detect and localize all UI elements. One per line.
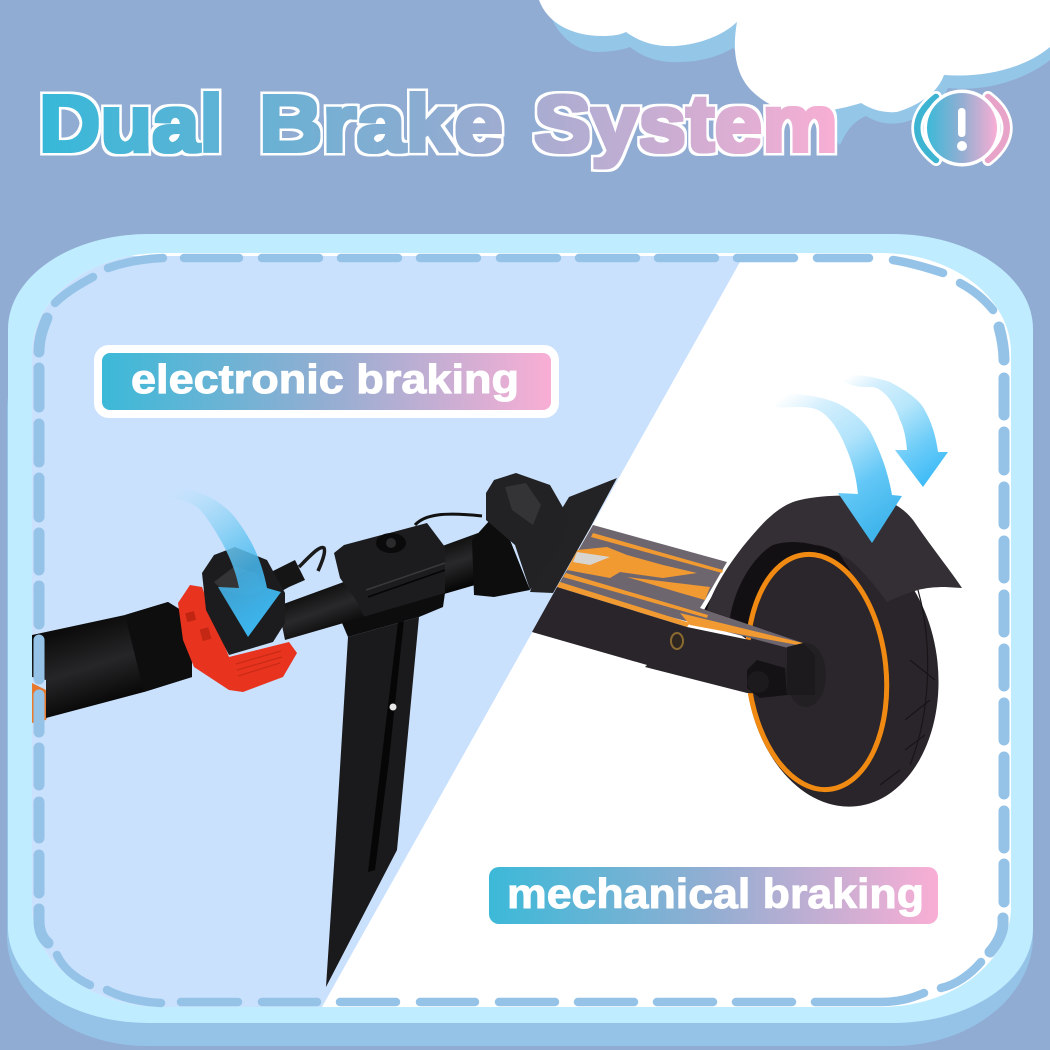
title: Dual (39, 79, 223, 168)
scooter: deck (532, 525, 803, 695)
label: electronic braking (94, 345, 559, 418)
title (39, 79, 838, 168)
arrow: mechanical brake front (770, 394, 902, 543)
small connector and cable (271, 514, 482, 592)
right brake knob (472, 473, 617, 597)
grip (32, 602, 192, 723)
arrow: electronic brake (150, 487, 281, 637)
deck side (532, 587, 788, 695)
left brake lever (202, 547, 285, 655)
deck top (557, 525, 803, 648)
arrow: mechanical brake rear (840, 375, 948, 487)
panel: outer frame (8, 234, 1033, 1023)
scooter: fender (707, 496, 962, 618)
title: Brake (259, 79, 503, 168)
hub disc (736, 547, 898, 797)
label: electronic braking: electronic braking (131, 356, 519, 402)
scooter: rear tyre and hub disc (704, 528, 952, 816)
tyre tread (880, 590, 935, 785)
label: mechanical braking: mechanical braking (507, 870, 924, 917)
panel: outer frame shadow (7, 300, 1033, 1046)
dashed border (39, 258, 1004, 1003)
icon: brake warning (917, 90, 1007, 166)
scooter: axle (747, 643, 826, 707)
scooter: handlebar (32, 473, 617, 987)
tube (278, 533, 482, 640)
cloud decoration (539, 0, 1050, 145)
red brake dial (178, 585, 297, 692)
panel: inner background (32, 253, 1011, 1007)
stem (326, 617, 419, 987)
clamp (334, 523, 445, 637)
fender underside (704, 535, 850, 640)
title: System (534, 79, 838, 168)
